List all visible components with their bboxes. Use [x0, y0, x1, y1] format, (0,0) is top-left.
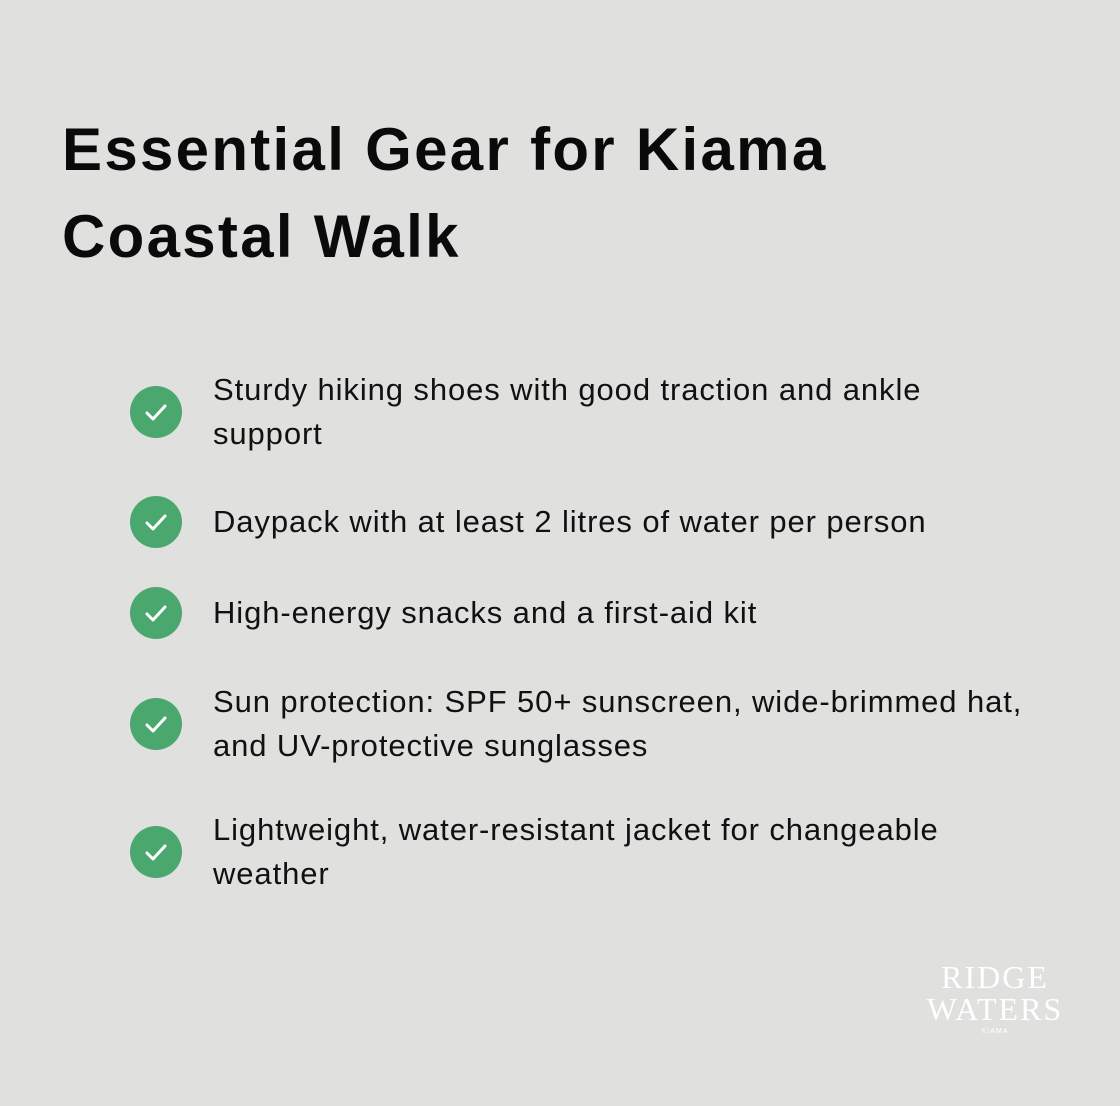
text: High-energy snacks and a first-aid kit: [213, 595, 757, 630]
text: and UV-protective sunglasses: [213, 728, 648, 763]
logo: KIAMA: [982, 1028, 1008, 1035]
title: Essential Gear for Kiama: [62, 116, 828, 183]
item 4: [130, 684, 1022, 763]
icon: check: [130, 386, 182, 438]
logo: RIDGE: [941, 959, 1049, 995]
text: weather: [213, 856, 330, 891]
icon: check: [130, 587, 182, 639]
icon: check: [130, 496, 182, 548]
text: Daypack with at least 2 litres of water per person: [213, 504, 927, 539]
item 5: [130, 812, 939, 891]
item 1: [130, 372, 921, 451]
text: Sun protection: SPF 50+ sunscreen, wide-brimmed hat,: [213, 684, 1022, 719]
text: [213, 372, 921, 451]
title: [62, 116, 828, 270]
logo: [926, 959, 1063, 1035]
logo: WATERS: [927, 991, 1063, 1027]
text: Sturdy hiking shoes with good traction and ankle: [213, 372, 921, 407]
title: Coastal Walk: [62, 203, 461, 270]
item 3: [130, 587, 757, 639]
icon: check: [130, 698, 182, 750]
icon: check: [130, 826, 182, 878]
text: [213, 812, 939, 891]
text: support: [213, 416, 323, 451]
text: Lightweight, water-resistant jacket for changeable: [213, 812, 939, 847]
text: [213, 684, 1022, 763]
item 2: [130, 496, 927, 548]
